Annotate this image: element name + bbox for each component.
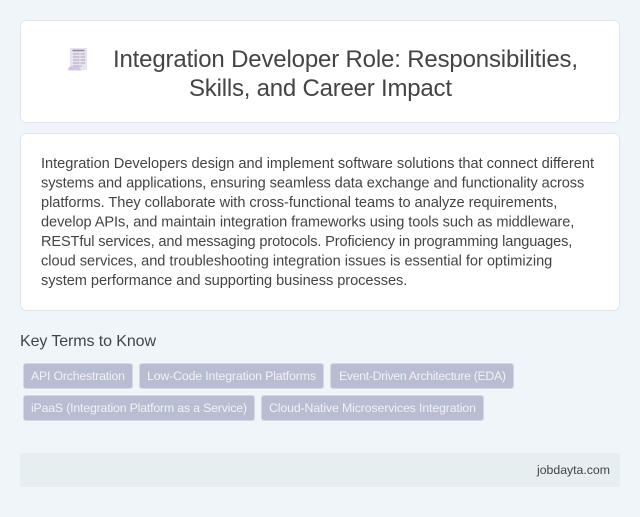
text block: role description: system performance and supporting business processes. bbox=[41, 273, 407, 289]
title: Integration Developer Role: Responsibilities, bbox=[113, 46, 578, 73]
tag: API Orchestration: API Orchestration bbox=[31, 369, 125, 383]
text block: role description bbox=[41, 156, 594, 289]
tag: Event-Driven Architecture: Event-Driven Architecture (EDA) bbox=[339, 369, 506, 383]
panel: description card bbox=[20, 134, 620, 310]
text block: role description: develop APIs, and maintain integration frameworks using tools such as middleware, bbox=[41, 214, 574, 230]
text block: role description: RESTful services, and messaging protocols. Proficiency in programming languages, bbox=[41, 234, 572, 250]
text block: role description: cloud services, and troubleshooting integration issues is essential for optimizing bbox=[41, 254, 552, 270]
tag: Low-Code Integration Platforms: Low-Code Integration Platforms bbox=[147, 369, 316, 383]
footer: jobdayta.com bbox=[536, 463, 610, 477]
heading: key terms: Key Terms to Know bbox=[20, 333, 156, 350]
title bbox=[113, 46, 578, 102]
tag: Low-Code Integration Platforms bbox=[140, 364, 324, 388]
tag: iPaaS bbox=[24, 396, 254, 420]
tag list bbox=[24, 364, 514, 420]
text block: role description: systems and applications, ensuring seamless data exchange and functionality across bbox=[41, 176, 584, 192]
panel: header card bbox=[20, 20, 620, 122]
tag: Cloud-Native Microservices Integration bbox=[262, 396, 484, 420]
tag: Cloud-Native Microservices Integration: Cloud-Native Microservices Integration bbox=[269, 401, 476, 415]
tag: iPaaS: iPaaS (Integration Platform as a Service) bbox=[31, 401, 247, 415]
icon: document scroll bbox=[68, 48, 87, 70]
tag: Event-Driven Architecture bbox=[330, 364, 514, 388]
text block: role description: Integration Developers design and implement software solutions that connect different bbox=[41, 156, 594, 172]
text block: role description: platforms. They collaborate with cross-functional teams to analyze requirements, bbox=[41, 195, 557, 211]
footer bbox=[20, 453, 620, 487]
title: Skills, and Career Impact bbox=[189, 75, 452, 102]
tag: API Orchestration bbox=[24, 364, 132, 388]
